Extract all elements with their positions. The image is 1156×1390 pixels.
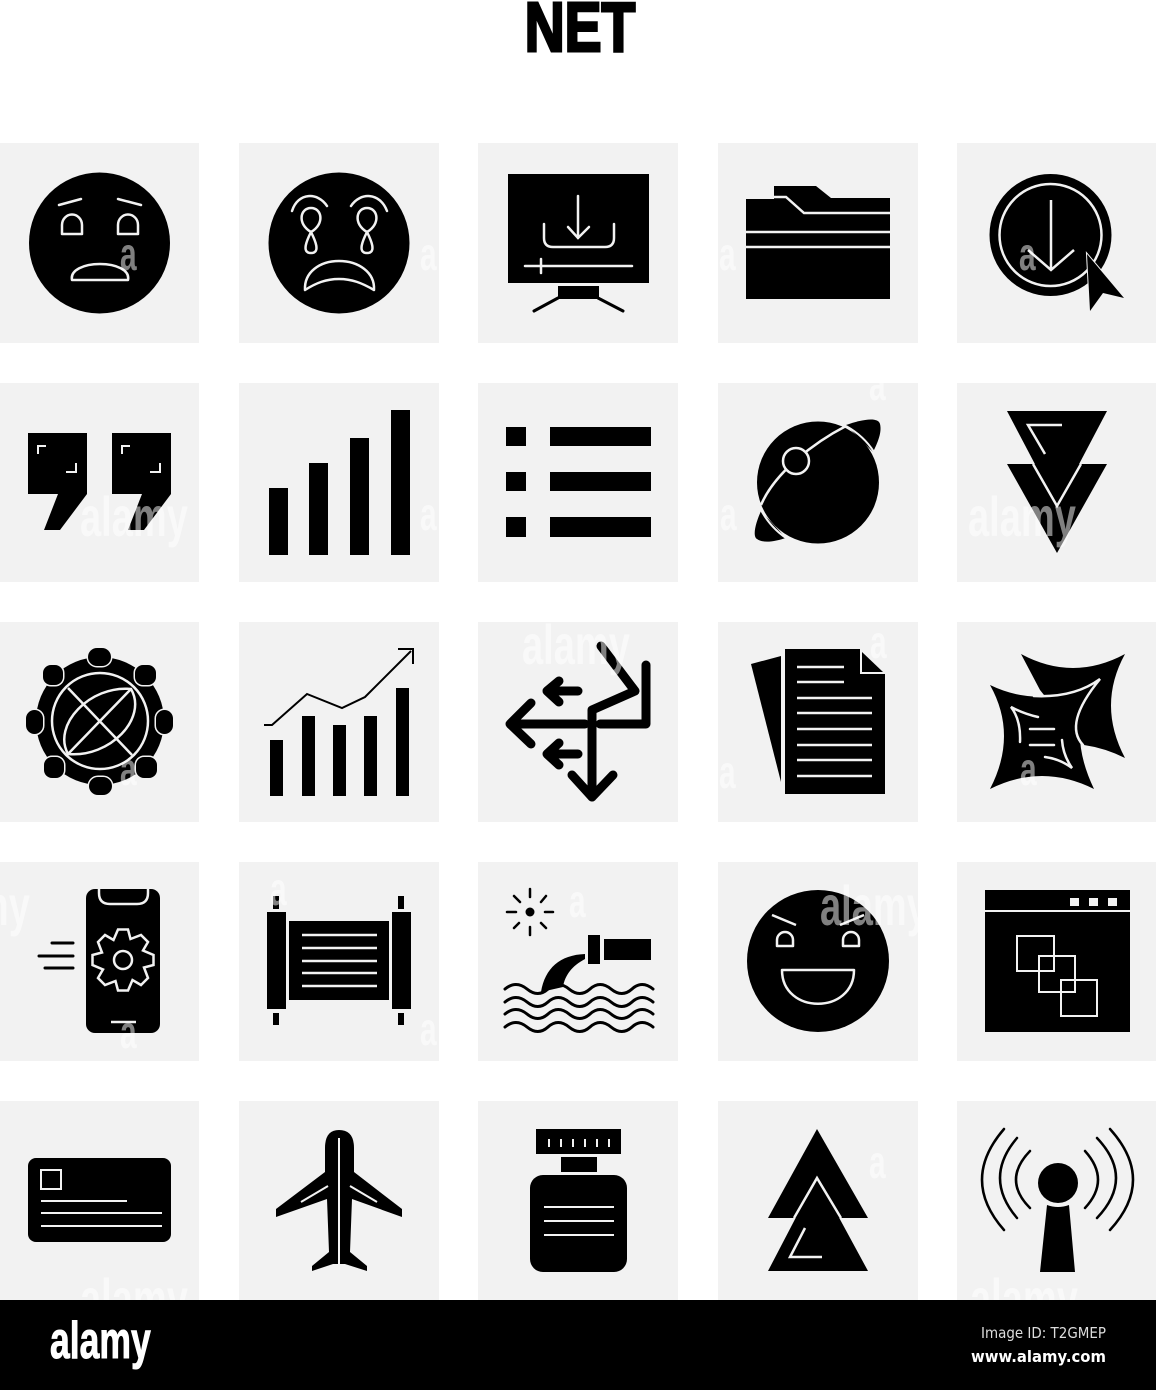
icon: credit card [28,1158,171,1242]
watermarks: a [1019,230,1036,281]
watermarks: a [870,618,887,669]
icon: globe network [26,648,173,795]
icon: quotation marks [28,433,171,530]
icon: signal tower [982,1129,1133,1272]
watermarks: a [420,230,437,281]
footer bar [0,1300,1156,1390]
watermarks: alamy [80,1269,188,1331]
icon: perfume bottle [530,1129,627,1272]
icon: planet [755,419,881,544]
icon: scroll [267,896,411,1025]
watermarks: a [420,1005,437,1056]
icon: monitor download [508,174,649,311]
watermarks: a [1020,745,1037,796]
watermarks: alamy [970,1269,1078,1331]
watermarks: a [120,745,137,796]
watermarks: a [869,1138,886,1189]
watermarks: alamy [968,487,1076,549]
bar chart icon [269,410,410,555]
watermarks: a [569,877,586,928]
icon: double up triangles [768,1129,868,1271]
image id: Image ID: T2GMEP [981,1324,1106,1342]
watermarks: a [719,230,736,281]
watermarks: a [720,490,737,541]
watermarks: a [719,748,736,799]
logo text: alamy [50,1310,151,1370]
watermarks: a [270,865,287,916]
icon: stacked curved sheets [990,654,1125,789]
watermarks: a [120,230,137,281]
icon: airplane [276,1130,402,1271]
watermarks: alamy [522,615,630,677]
icon: diverging arrows [510,646,646,797]
icon: double down triangles [1007,411,1107,553]
icon: documents [751,649,885,794]
watermarks: a [420,490,437,541]
watermarks: a [869,360,886,411]
watermarks: alamy [820,876,928,938]
icon: worried face [29,172,170,314]
watermarks: alamy [80,487,188,549]
icon: laughing face [747,890,889,1032]
watermarks: a [120,1008,137,1059]
icon: growth chart with arrow [264,649,413,796]
icon: phone settings [39,889,160,1033]
icon: list [506,427,651,537]
icon: crying face [268,172,410,314]
icon: folder [746,186,890,299]
website: www.alamy.com [971,1347,1106,1366]
icon: sewage pipe [505,889,653,1032]
icon: browser window [985,890,1130,1032]
watermarks [0,230,1078,1331]
icon: download circle with cursor [990,174,1124,311]
